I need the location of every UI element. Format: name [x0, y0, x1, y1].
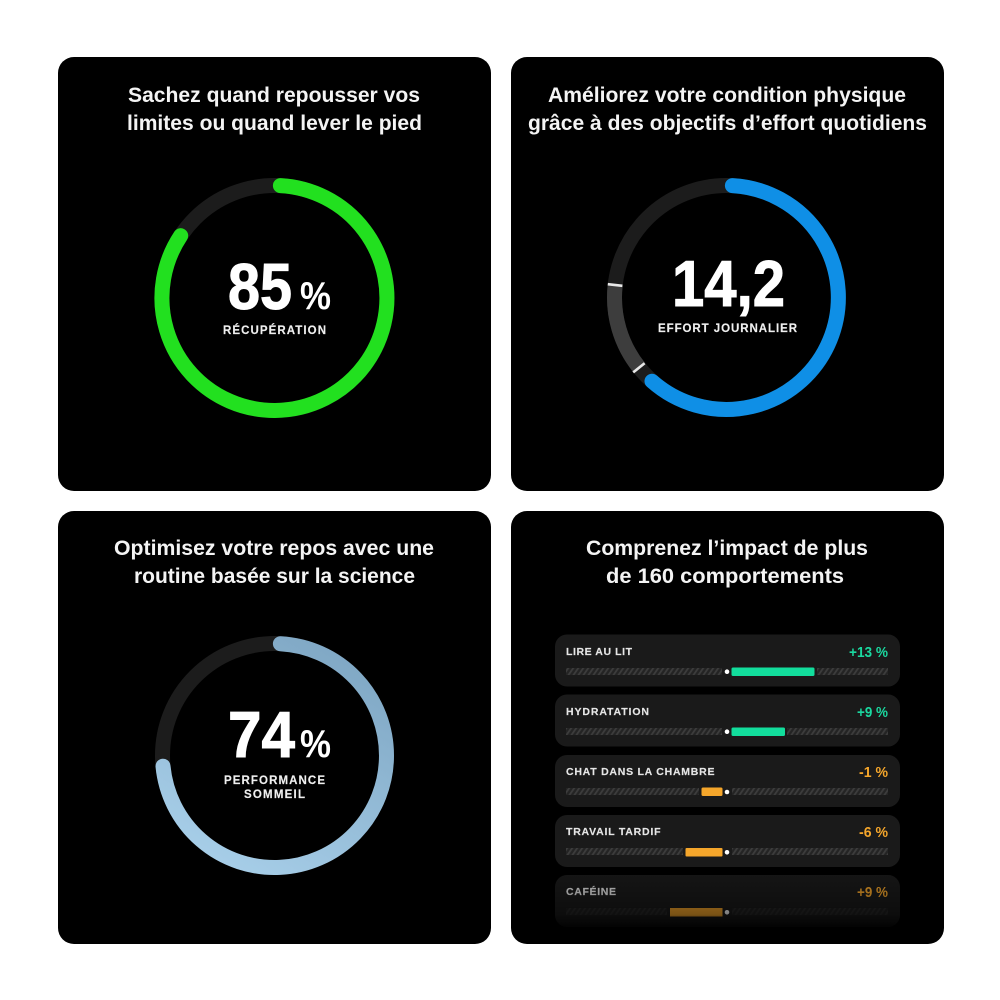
heading: sleep performance [114, 537, 434, 588]
heading: recovery [127, 84, 422, 135]
value: 74% sleep performance: % [300, 723, 331, 766]
fade overlay on last row [550, 875, 905, 931]
heading: daily effort: grâce à des objectifs d’effort quotidiens [528, 112, 927, 135]
value: 14,2 daily effort: 14,2 [672, 247, 785, 320]
row: caffeine: CAFÉINE [566, 885, 616, 898]
value: 85% recovery: % [300, 275, 331, 318]
value: 74% sleep performance: PERFORMANCE [224, 775, 325, 787]
value: 85% recovery: RÉCUPÉRATION [223, 324, 326, 337]
row: hydration: +9 % [857, 705, 888, 721]
ring chart: daily effort 14,2 [608, 186, 838, 410]
heading: daily effort: Améliorez votre condition physique [548, 84, 906, 107]
row: cat in the bedroom [555, 755, 900, 807]
value: 85% recovery: 85 [228, 250, 292, 323]
panel: recovery [58, 57, 491, 491]
heading: recovery: Sachez quand repousser vos [128, 84, 420, 107]
row: late work [555, 815, 900, 867]
value: 74% sleep performance: 74 [228, 698, 295, 771]
row: reading in bed [555, 634, 900, 686]
row: hydration: HYDRATATION [566, 706, 649, 718]
value: 14,2 daily effort: EFFORT JOURNALIER [658, 323, 798, 335]
value: 85% recovery [223, 250, 331, 337]
heading: daily effort [528, 84, 927, 135]
value: 74% sleep performance: SOMMEIL [244, 789, 305, 801]
heading: behaviours [586, 537, 868, 588]
row: late work: TRAVAIL TARDIF [566, 826, 661, 838]
ring chart: sleep 74% [162, 644, 386, 868]
heading: recovery: limites ou quand lever le pied [127, 112, 422, 135]
heading: behaviours: Comprenez l’impact de plus [586, 537, 868, 560]
row: hydration [555, 694, 900, 746]
heading: sleep performance: Optimisez votre repos avec une [114, 537, 434, 560]
row: cat in the bedroom: -1 % [859, 765, 888, 781]
heading: sleep performance: routine basée sur la science [134, 565, 415, 588]
panel: sleep performance [58, 511, 491, 944]
ring chart: recovery 85% [162, 186, 387, 410]
row: cat in the bedroom: CHAT DANS LA CHAMBRE [566, 766, 714, 778]
panel: behaviours [511, 511, 944, 944]
value: 74% sleep performance [224, 698, 331, 801]
row: caffeine: +9 % [857, 885, 888, 901]
panel: daily effort [511, 57, 944, 491]
heading: behaviours: de 160 comportements [606, 565, 844, 588]
row: reading in bed: +13 % [849, 645, 888, 661]
row: reading in bed: LIRE AU LIT [566, 646, 633, 658]
row: late work: -6 % [859, 825, 888, 841]
row: caffeine [555, 875, 900, 927]
